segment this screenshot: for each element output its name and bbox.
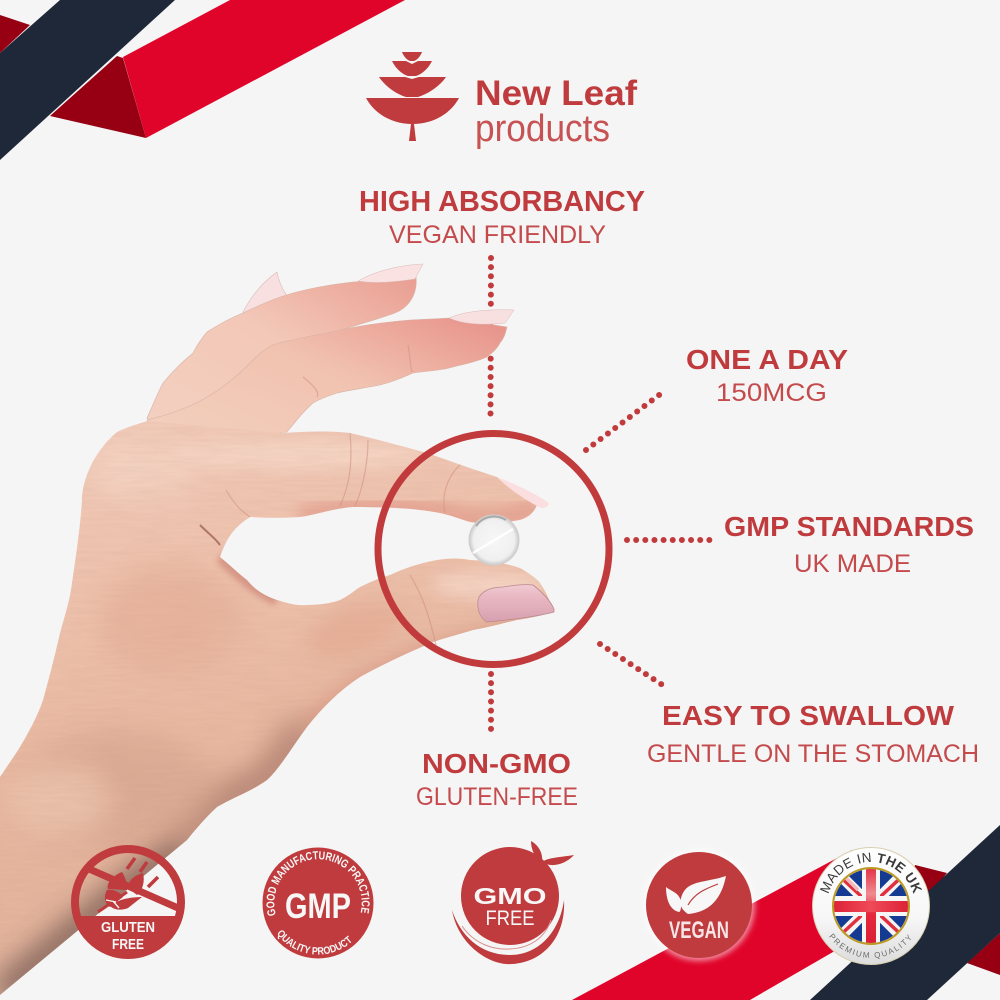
badge: gmp (262, 848, 374, 958)
hand shading and skin texture (0, 420, 560, 995)
logo wordmark: New Leaf (475, 74, 637, 113)
back finger nail (243, 272, 287, 316)
text block: non-gmo (416, 748, 578, 811)
badge: gmo free (452, 841, 574, 964)
union flag (834, 869, 908, 943)
badge: made in the uk (812, 847, 930, 965)
text block: easy to swallow (647, 700, 979, 768)
highlight ring around pill (378, 434, 609, 664)
badge: gluten free: GLUTEN (101, 920, 155, 936)
text block: high absorbancy: HIGH ABSORBANCY (359, 186, 645, 218)
logo icon: tiered leaf (366, 52, 459, 141)
badge: gluten free: FREE (112, 937, 144, 953)
text block: gmp standards (724, 511, 974, 578)
logo (366, 52, 637, 150)
hand photo illustration (0, 264, 560, 995)
middle finger (147, 318, 507, 445)
index finger nail (497, 477, 549, 508)
text block: one a day (686, 344, 848, 407)
badge: gluten free (73, 849, 183, 958)
badge: gmo free: GMO (474, 883, 546, 909)
decorative ribbons: top left (0, 0, 405, 160)
logo: products (475, 108, 610, 150)
middle finger nail (449, 310, 514, 324)
upper finger (147, 277, 416, 440)
badge: made in the uk: PREMIUM QUALITY (829, 933, 911, 959)
badge: gmp: QUALITY PRODUCT (278, 930, 352, 955)
knuckle creases (200, 345, 460, 645)
text block: non-gmo: GLUTEN-FREE (416, 783, 578, 811)
decorative ribbons: bottom right (572, 825, 1000, 1000)
text block: easy to swallow: EASY TO SWALLOW (662, 700, 955, 731)
text block: high absorbancy (359, 186, 645, 249)
text block: non-gmo: NON-GMO (422, 748, 571, 779)
pill (469, 515, 519, 565)
badge: gmp: GMP (285, 887, 351, 926)
dotted connector lines (490, 258, 712, 733)
badge: gmo free: FREE (486, 907, 534, 930)
text block: gmp standards: GMP STANDARDS (724, 511, 974, 542)
text block: one a day: 150MCG (716, 379, 827, 407)
text block: high absorbancy: VEGAN FRIENDLY (389, 221, 606, 249)
text block: one a day: ONE A DAY (686, 344, 848, 375)
badge: vegan (643, 849, 755, 961)
palm, index finger and thumb (0, 421, 553, 995)
badge: vegan: VEGAN (669, 917, 729, 944)
text block: gmp standards: UK MADE (794, 550, 911, 578)
upper finger nail (358, 264, 423, 282)
medal lettering: MADE IN THE UK (820, 852, 922, 894)
badge: gmp: GOOD MANUFACTURING PRACTICE (266, 851, 370, 916)
text block: easy to swallow: GENTLE ON THE STOMACH (647, 740, 979, 768)
thumb nail (478, 585, 554, 622)
